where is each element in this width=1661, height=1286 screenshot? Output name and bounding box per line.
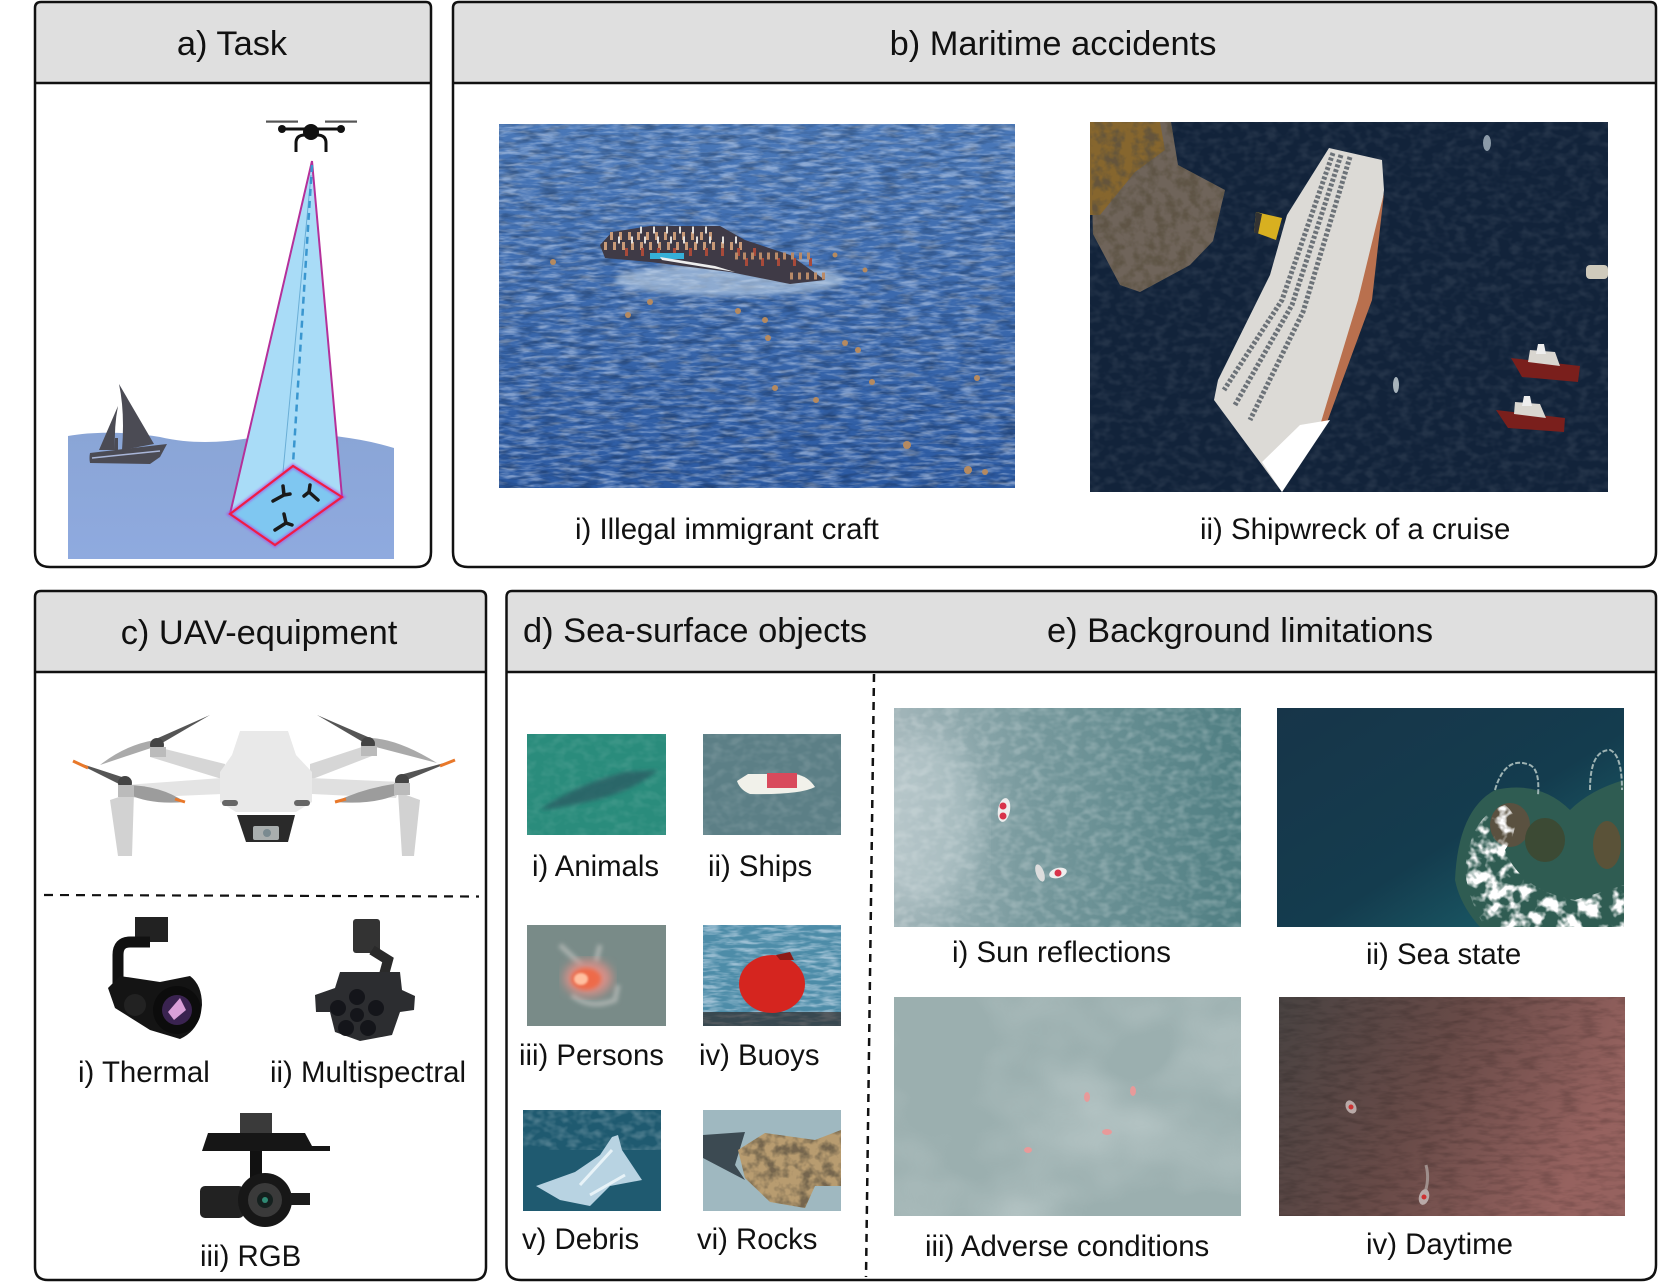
caption: illegal immigrant craft: i) Illegal immigrant craft xyxy=(575,513,879,546)
caption: sea state: ii) Sea state xyxy=(1366,938,1521,971)
divider: vertical dashed xyxy=(866,674,874,1277)
photo: ships xyxy=(703,734,841,835)
caption: buoys: iv) Buoys xyxy=(699,1039,819,1072)
caption: debris: v) Debris xyxy=(522,1223,639,1256)
photo: buoys xyxy=(703,925,841,1026)
photo: illegal immigrant craft xyxy=(499,124,1015,488)
sea background xyxy=(68,433,394,559)
heading: c) UAV-equipment: c) UAV-equipment xyxy=(121,614,398,652)
photo: rocks xyxy=(703,1110,841,1211)
photo: thermal camera xyxy=(108,917,202,1039)
photo: persons xyxy=(527,925,666,1026)
panel: a) Task xyxy=(35,2,431,567)
caption: rocks: vi) Rocks xyxy=(697,1223,817,1256)
photo: sun reflections xyxy=(870,708,1241,927)
rocks and foam xyxy=(1455,750,1624,927)
icon: sailboat xyxy=(90,384,167,464)
photo: daytime xyxy=(1279,997,1625,1216)
caption: shipwreck of a cruise: ii) Shipwreck of a cruise xyxy=(1200,513,1510,546)
photo: multispectral camera xyxy=(315,919,415,1041)
caption: persons: iii) Persons xyxy=(519,1039,664,1072)
panel: d/e) Sea-surface objects and background limitations xyxy=(506,591,1656,1280)
cruise ship xyxy=(1214,148,1384,492)
caption: sun reflections: i) Sun reflections xyxy=(952,936,1171,969)
caption: multispectral: ii) Multispectral xyxy=(270,1056,466,1089)
caption: animals: i) Animals xyxy=(532,850,659,883)
photo: animals xyxy=(527,734,666,835)
heading: b) Maritime accidents: b) Maritime accidents xyxy=(890,25,1216,63)
caption: ships: ii) Ships xyxy=(708,850,812,883)
icon: small drone xyxy=(266,120,357,152)
swimmers xyxy=(550,252,988,475)
funnel xyxy=(1254,212,1282,240)
photo: adverse conditions xyxy=(894,997,1241,1216)
tug boats xyxy=(1393,135,1608,432)
heading: e) Background limitations: e) Background limitations xyxy=(1047,612,1433,650)
caption: thermal: i) Thermal xyxy=(78,1056,210,1089)
icon: targets in sea xyxy=(273,485,318,530)
caption: RGB: iii) RGB xyxy=(200,1240,301,1273)
panel: b) Maritime accidents xyxy=(453,2,1656,567)
divider: dashed xyxy=(44,895,479,896)
boats xyxy=(996,797,1012,823)
caption: daytime: iv) Daytime xyxy=(1366,1228,1513,1261)
photo: shipwreck of a cruise xyxy=(1090,122,1608,492)
heading: d) Sea-surface objects: d) Sea-surface objects xyxy=(523,612,867,650)
photo: drone xyxy=(73,715,455,856)
rocks xyxy=(1090,122,1225,292)
panel: c) UAV-equipment xyxy=(35,591,486,1280)
photo: debris xyxy=(523,1110,661,1211)
crowd on craft xyxy=(600,226,845,296)
caption: adverse conditions: iii) Adverse conditions xyxy=(925,1230,1209,1263)
heading: a) Task: a) Task xyxy=(177,25,288,63)
photo: sea state xyxy=(1277,708,1624,927)
photo: RGB camera xyxy=(200,1113,330,1227)
icon: field-of-view pyramid xyxy=(230,161,342,545)
